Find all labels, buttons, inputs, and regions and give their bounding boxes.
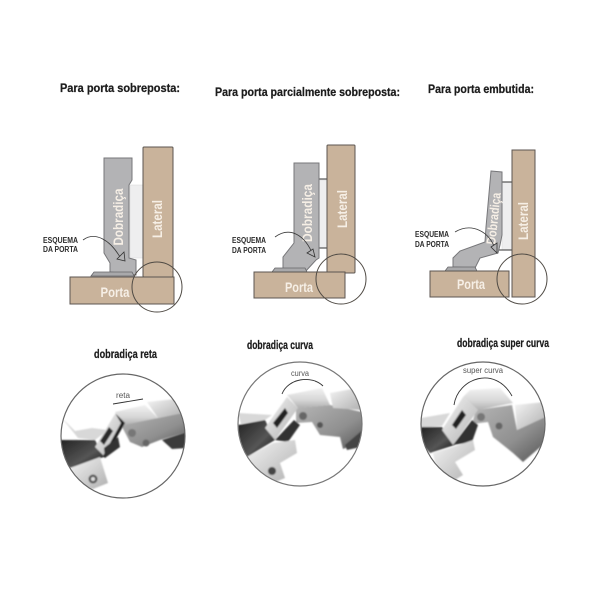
hinge arm lines bbox=[497, 182, 512, 250]
arrow: to hinge bbox=[275, 232, 315, 257]
lens circle bbox=[421, 362, 545, 486]
panel: para porta embutida bbox=[415, 82, 547, 304]
panel: para porta sobreposta bbox=[43, 81, 182, 312]
board: porta bbox=[254, 272, 345, 298]
label: esquema da porta: DA PORTA bbox=[415, 240, 449, 249]
photo: super curved hinge bbox=[421, 388, 545, 483]
hinge body bbox=[283, 163, 319, 272]
photo: curved hinge bbox=[238, 388, 365, 483]
heading: dobradiça curva: dobradiça curva bbox=[247, 338, 313, 352]
heading: para porta parcialmente sobreposta: Para porta parcialmente sobreposta: bbox=[215, 85, 400, 99]
heading: para porta embutida: Para porta embutida: bbox=[428, 82, 534, 96]
hinge base plate bbox=[91, 272, 134, 276]
board: lateral bbox=[512, 150, 535, 297]
gap behind hinge bbox=[130, 185, 143, 258]
heading: dobradiça super curva: dobradiça super curva bbox=[457, 336, 549, 350]
label: dobradiça: Dobradiça bbox=[110, 188, 126, 246]
label: dobradiça: Dobradiça bbox=[483, 191, 504, 245]
label: esquema da porta: DA PORTA bbox=[232, 246, 266, 255]
label: porta: Porta bbox=[285, 279, 313, 295]
label: super curva: super curva bbox=[463, 366, 504, 375]
label: lateral: Lateral bbox=[334, 190, 350, 228]
lens circle bbox=[61, 374, 185, 498]
photo: straight hinge bbox=[60, 399, 187, 489]
board: lateral bbox=[327, 145, 355, 273]
heading: dobradiça reta: dobradiça reta bbox=[94, 347, 157, 361]
measure arc: curva bbox=[282, 379, 323, 394]
label: lateral: Lateral bbox=[149, 200, 165, 238]
gap behind hinge bbox=[502, 182, 512, 250]
detail circle bbox=[497, 254, 547, 304]
label: porta: Porta bbox=[457, 276, 485, 292]
hinge base plate bbox=[445, 267, 477, 271]
lens circle bbox=[238, 362, 362, 486]
panel: dobradiça curva bbox=[238, 338, 365, 486]
board: lateral bbox=[143, 147, 173, 277]
panel: dobradiça super curva bbox=[421, 336, 549, 486]
board: porta bbox=[430, 271, 509, 297]
hinge body bbox=[453, 171, 502, 268]
label: dobradiça: Dobradiça bbox=[299, 184, 315, 242]
detail circle bbox=[316, 254, 366, 304]
arrow: to hinge bbox=[455, 228, 497, 253]
label: esquema da porta: DA PORTA bbox=[43, 245, 78, 254]
panel: dobradiça reta bbox=[60, 347, 187, 498]
gap behind hinge bbox=[319, 180, 327, 248]
measure arc: super curva bbox=[454, 378, 512, 405]
hinge arm lines bbox=[319, 179, 327, 248]
label: esquema da porta: ESQUEMA bbox=[232, 236, 266, 245]
measure line: reta bbox=[113, 399, 143, 404]
label: reta: reta bbox=[116, 391, 131, 400]
hinge base plate bbox=[272, 268, 307, 272]
label: porta: Porta bbox=[100, 284, 130, 300]
label: lateral: Lateral bbox=[515, 202, 531, 240]
heading: para porta sobreposta: Para porta sobreposta: bbox=[60, 81, 180, 95]
hinge body bbox=[104, 158, 136, 275]
board: porta bbox=[70, 277, 174, 304]
detail circle bbox=[132, 262, 182, 312]
label: esquema da porta: ESQUEMA bbox=[415, 230, 449, 239]
label: curva: curva bbox=[291, 369, 310, 378]
arrow: to hinge bbox=[83, 236, 125, 261]
panel: para porta parcialmente sobreposta bbox=[215, 85, 400, 304]
label: esquema da porta: ESQUEMA bbox=[43, 236, 78, 245]
